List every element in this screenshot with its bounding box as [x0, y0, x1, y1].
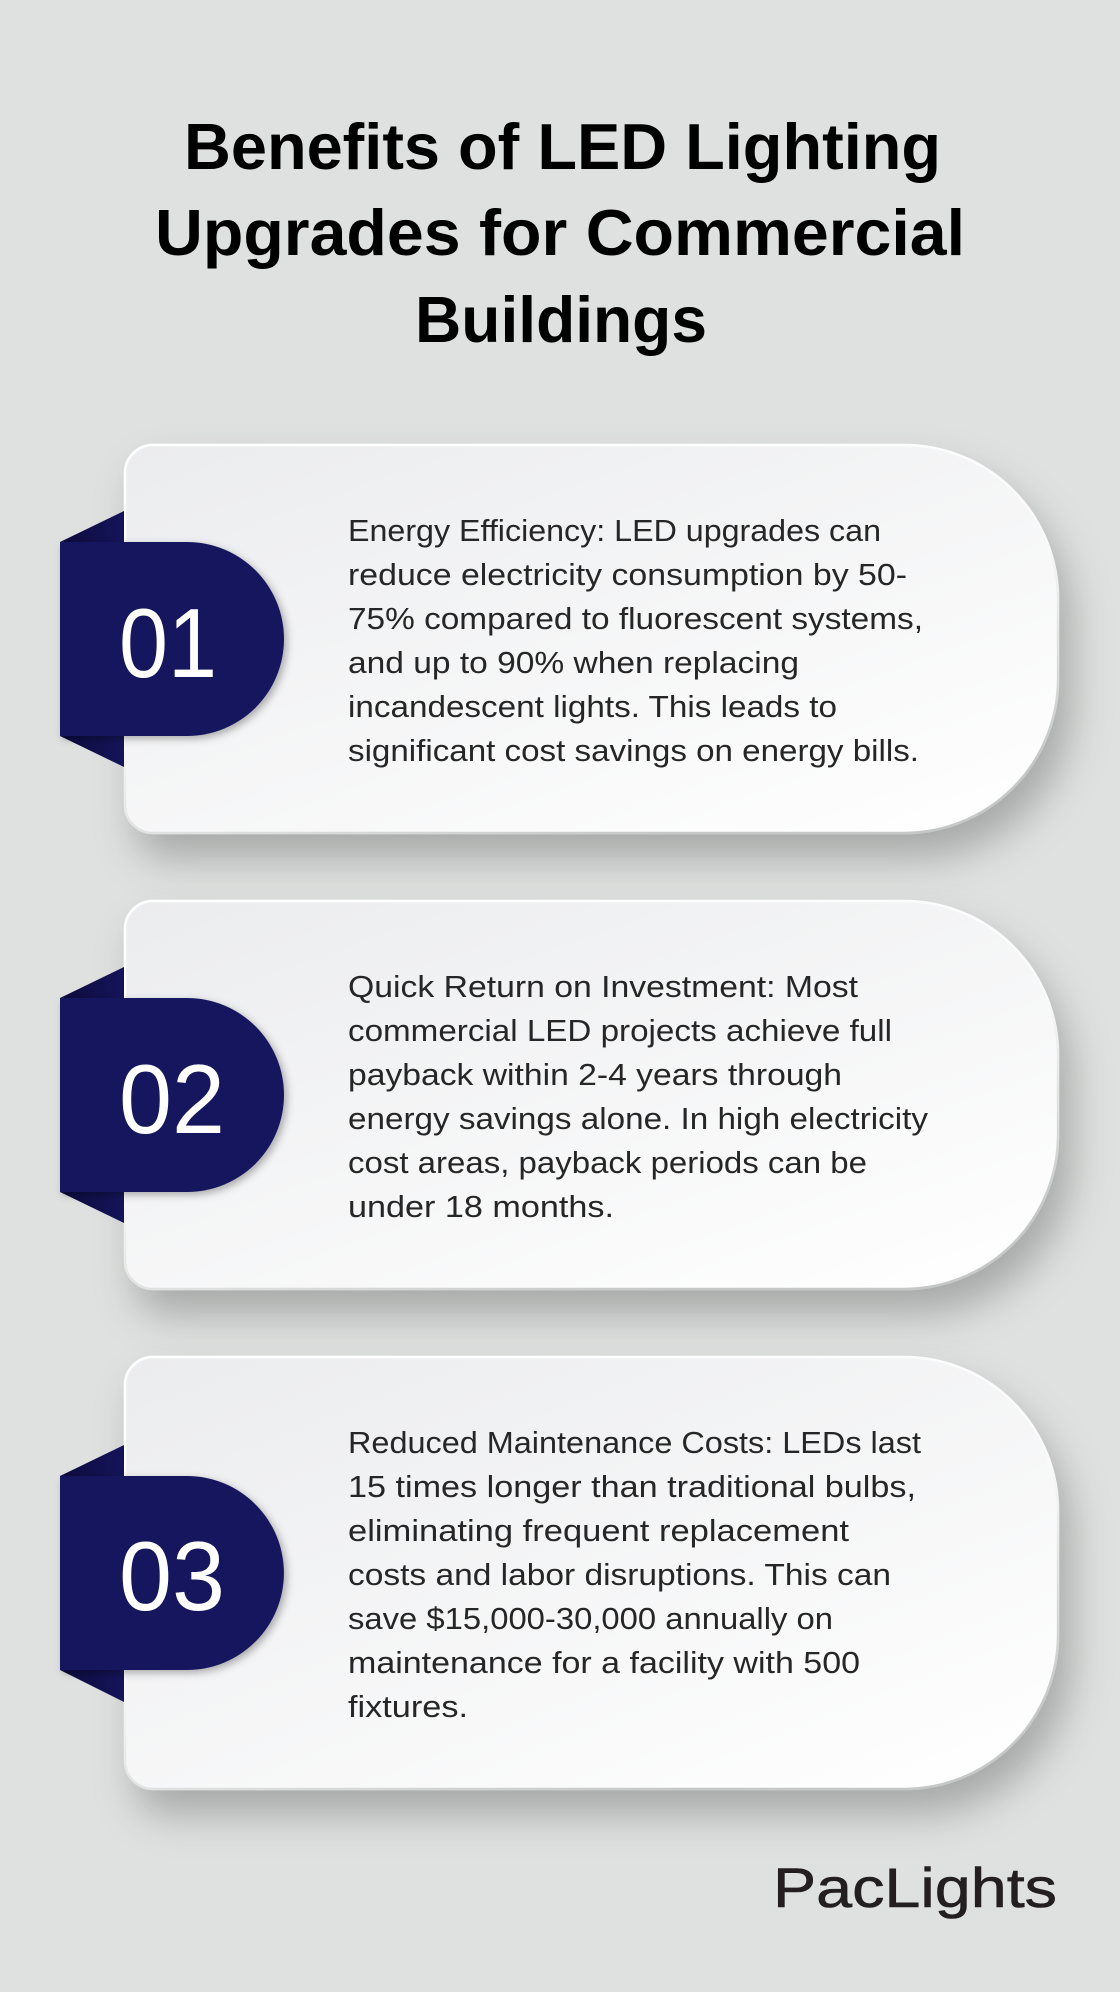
body text: Quick Return on Investment: Most: [348, 969, 858, 1004]
body text: commercial LED projects achieve full: [348, 1013, 892, 1048]
body text: [348, 1425, 921, 1724]
body text: payback within 2-4 years through: [348, 1057, 842, 1092]
number badge 03: 03: [119, 1521, 225, 1631]
panel: energy efficiency: [60, 445, 1058, 833]
card background: [125, 901, 1058, 1289]
body text: energy savings alone. In high electricity: [348, 1101, 929, 1136]
panel: reduced maintenance costs: [60, 1357, 1058, 1789]
body text: eliminating frequent replacement: [348, 1513, 849, 1548]
title: Benefits of LED Lighting: [184, 110, 941, 183]
body text: 15 times longer than traditional bulbs,: [348, 1469, 916, 1504]
logo: PacLights: PacLights: [773, 1856, 1057, 1919]
number badge 03: [60, 1445, 284, 1702]
panel: quick return on investment: [60, 901, 1058, 1289]
body text: incandescent lights. This leads to: [348, 689, 837, 724]
title: Buildings: [415, 283, 707, 356]
body text: Energy Efficiency: LED upgrades can: [348, 513, 881, 548]
number badge 02: [60, 967, 284, 1223]
body text: reduce electricity consumption by 50-: [348, 557, 907, 592]
body text: significant cost savings on energy bills.: [348, 733, 919, 768]
body text: costs and labor disruptions. This can: [348, 1557, 891, 1592]
body text: [348, 969, 929, 1224]
card background: [125, 1357, 1058, 1789]
number badge 02: 02: [119, 1044, 225, 1154]
number badge 01: 01: [119, 588, 217, 698]
title: Upgrades for Commercial: [155, 196, 965, 269]
body text: save $15,000-30,000 annually on: [348, 1601, 833, 1636]
body text: Reduced Maintenance Costs: LEDs last: [348, 1425, 921, 1460]
body text: fixtures.: [348, 1689, 468, 1724]
body text: and up to 90% when replacing: [348, 645, 799, 680]
body text: under 18 months.: [348, 1189, 614, 1224]
body text: maintenance for a facility with 500: [348, 1645, 860, 1680]
body text: [348, 513, 923, 768]
number badge 01: [60, 511, 284, 767]
card background: [125, 445, 1058, 833]
body text: 75% compared to fluorescent systems,: [348, 601, 923, 636]
body text: cost areas, payback periods can be: [348, 1145, 867, 1180]
title: [155, 110, 965, 356]
